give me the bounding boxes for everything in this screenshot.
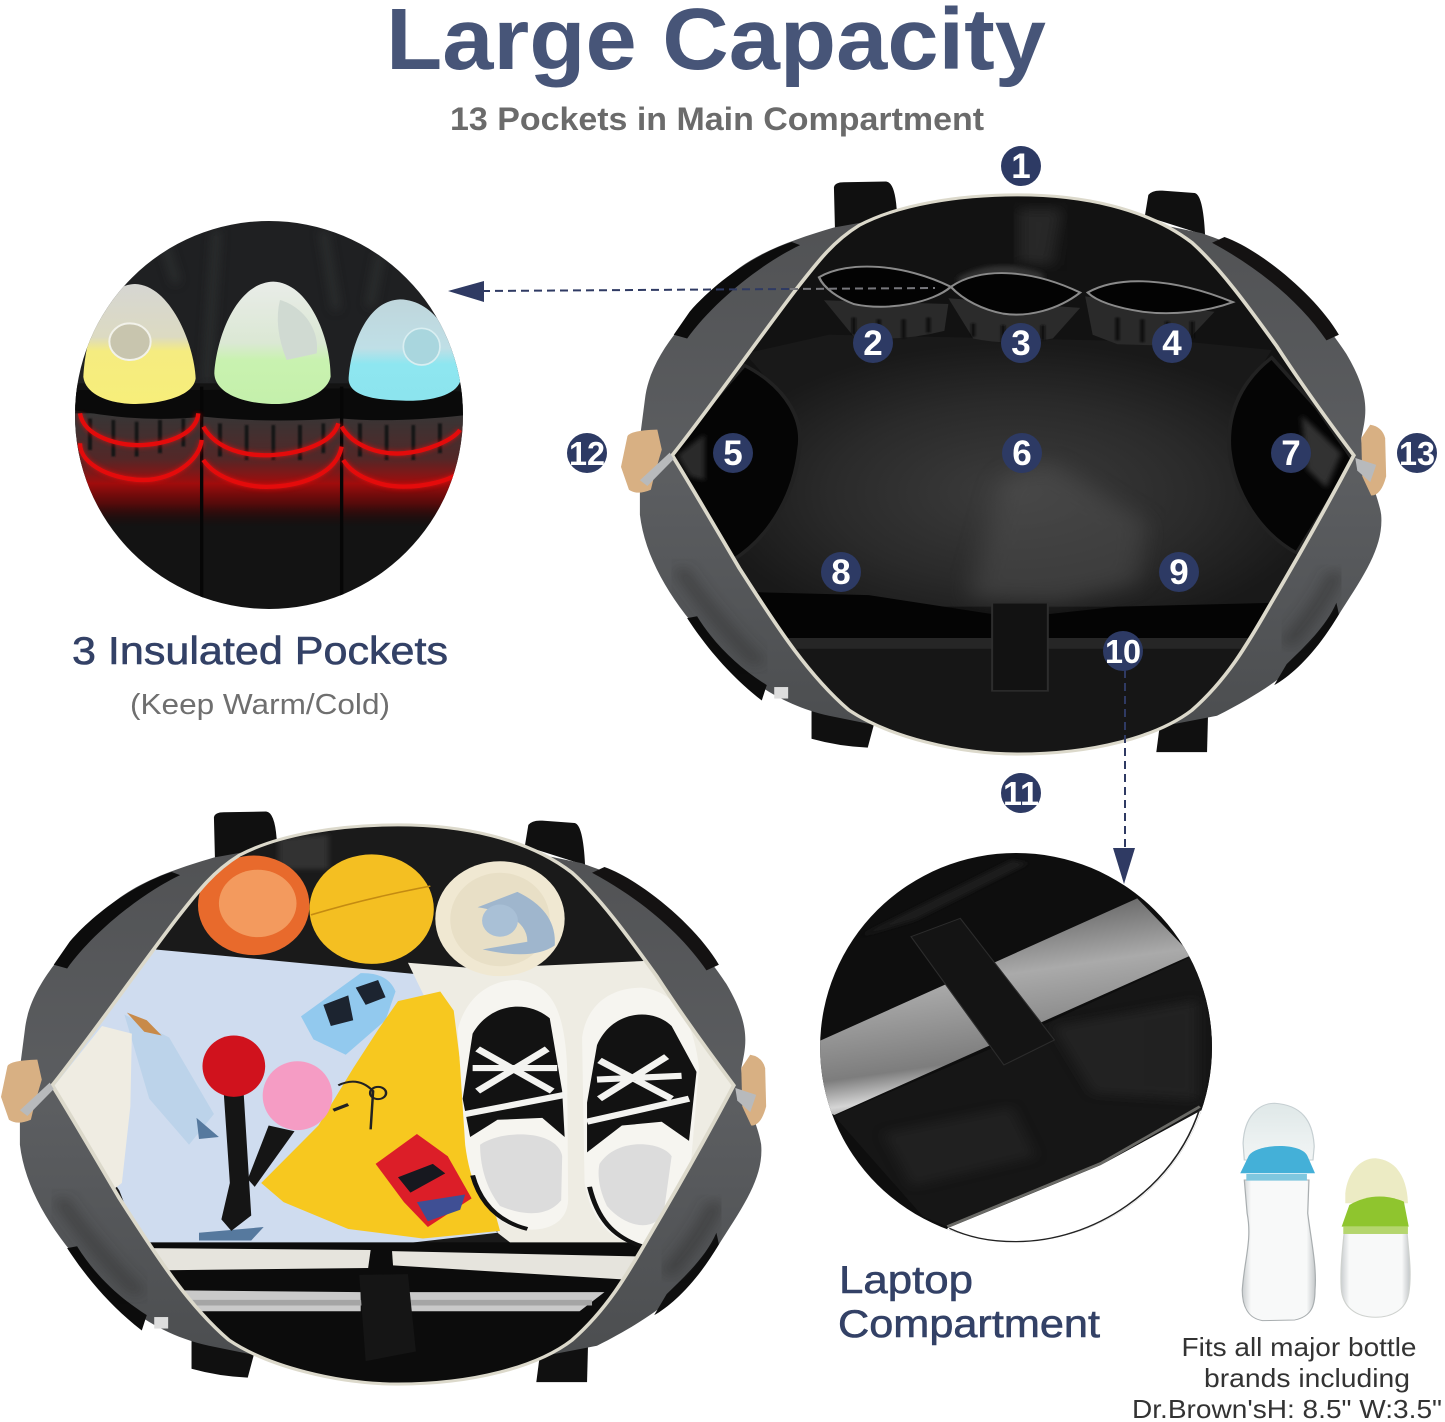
pocket body	[75, 383, 463, 609]
zipper seam	[947, 1107, 1200, 1227]
upper pockets	[819, 267, 1233, 315]
heading: laptop compartment: Laptop	[839, 1259, 973, 1302]
badge 13: 13	[1399, 435, 1435, 472]
red heat lines glow	[80, 413, 460, 487]
right shoe	[582, 988, 699, 1246]
icon: small green bottle	[1341, 1158, 1410, 1317]
badge 1: 1	[1011, 147, 1031, 186]
pocket seams	[202, 387, 342, 620]
bag shell	[20, 811, 761, 1384]
badge 6	[1002, 433, 1042, 473]
badge 9	[1159, 552, 1199, 592]
strap	[911, 918, 1054, 1065]
white below seam	[947, 1110, 1214, 1253]
arrow: to insulated pockets	[448, 281, 935, 302]
badge 10: 10	[1105, 633, 1141, 670]
text: bottle fit note: brands including	[1204, 1363, 1410, 1393]
badge 5: 5	[723, 434, 743, 473]
icon: tall blue bottle	[1240, 1103, 1315, 1321]
panel: insulated pockets circle	[75, 221, 463, 609]
badge 2	[853, 323, 893, 363]
laptop silver band	[818, 898, 1192, 1115]
red heat lines	[80, 413, 460, 487]
panel: packed bag	[0, 800, 780, 1401]
velcro strap	[992, 603, 1048, 691]
badge 1	[1001, 146, 1041, 186]
pink maraca	[248, 1061, 332, 1187]
badge 3	[1001, 323, 1041, 363]
badge 2: 2	[863, 324, 883, 363]
bottle yellow	[83, 284, 196, 404]
laptop sleeve	[757, 592, 1269, 638]
text: bottle fit note: Fits all major bottle	[1182, 1332, 1416, 1362]
circle clip	[810, 840, 1214, 1253]
cream cloth	[408, 961, 736, 1246]
badge 4: 4	[1162, 324, 1182, 363]
badge 3: 3	[1011, 324, 1031, 363]
orange cup	[198, 856, 309, 955]
badge 11: 11	[1003, 775, 1039, 812]
heading line 2: Compartment	[838, 1303, 1100, 1346]
leather zipper tabs	[1, 1055, 766, 1126]
red maraca	[202, 1036, 265, 1231]
yellow hat	[261, 992, 500, 1239]
badge 12: 12	[569, 435, 605, 472]
satin pocket gathers	[824, 300, 948, 339]
number badges	[567, 146, 1437, 813]
badge 9: 9	[1169, 553, 1189, 592]
badge 8	[821, 552, 861, 592]
bottle green	[214, 282, 331, 404]
bag interior	[674, 196, 1352, 752]
bottle blue	[349, 299, 461, 401]
badge 5	[713, 433, 753, 473]
bottom dark lining	[150, 1242, 640, 1382]
zipper edge	[672, 195, 1354, 754]
lower fabric	[834, 957, 1214, 1227]
badge 8: 8	[831, 553, 851, 592]
red toy car	[376, 1134, 472, 1227]
side pockets	[672, 365, 800, 561]
heading: 3 insulated pockets: 3 Insulated Pockets	[72, 630, 448, 673]
beige bottle cup	[435, 861, 565, 976]
text: bottle fit note	[1132, 1332, 1442, 1422]
badge 7	[1271, 433, 1311, 473]
panel: empty open bag	[620, 170, 1400, 771]
arrow: to laptop compartment	[1113, 670, 1135, 884]
white diaper	[55, 1026, 132, 1191]
circle outline	[949, 1108, 1200, 1242]
lining folds	[160, 230, 380, 383]
note: keep warm/cold: (Keep Warm/Cold)	[130, 689, 390, 721]
bag outer shell	[640, 181, 1381, 754]
upper lining folds	[1018, 208, 1063, 266]
badge 6: 6	[1012, 434, 1032, 473]
laptop edge	[172, 1290, 604, 1311]
fabric highlight	[858, 860, 1028, 937]
back panel	[734, 335, 1297, 607]
gathers	[90, 418, 440, 460]
velcro strap	[359, 1274, 416, 1361]
subtitle: 13 Pockets in Main Compartment	[450, 101, 984, 137]
panel: laptop compartment circle	[810, 840, 1214, 1253]
yellow ball	[309, 854, 434, 964]
badge 4	[1152, 323, 1192, 363]
blue toy car	[301, 973, 396, 1055]
left shoe	[458, 980, 568, 1230]
elastic band	[73, 388, 467, 420]
heat haze	[75, 413, 463, 523]
books	[144, 1248, 642, 1280]
badge 7: 7	[1281, 434, 1301, 473]
onesie clothes	[50, 949, 498, 1244]
zipper edge	[52, 825, 734, 1384]
bag contents	[54, 826, 732, 1382]
leather zipper tabs	[621, 425, 1386, 496]
